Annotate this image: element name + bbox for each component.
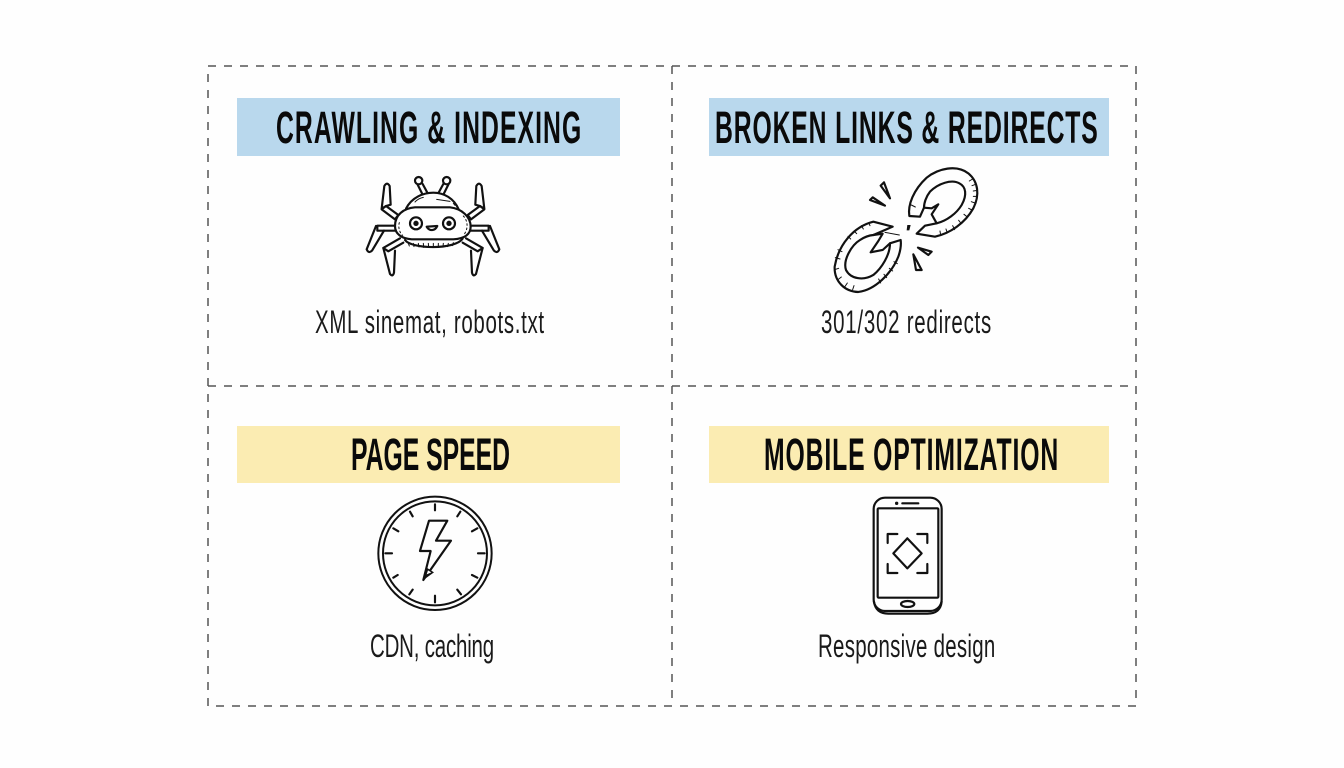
heading: page speed <box>237 426 620 483</box>
heading: mobile optimization: MOBILE OPTIMIZATION <box>764 429 1058 480</box>
caption: crawling and indexing: XML sinemat, robots.txt <box>315 304 545 340</box>
heading: crawling and indexing: CRAWLING & INDEXING <box>276 102 581 153</box>
dashed grid frame <box>208 66 1136 706</box>
icon: broken chain link <box>835 168 977 292</box>
caption: mobile optimization: Responsive design <box>818 628 995 664</box>
icon: stopwatch with lightning bolt <box>378 497 492 610</box>
icon: robot spider <box>367 177 499 275</box>
caption: broken links and redirects: 301/302 redirects <box>821 304 991 340</box>
panel: page speed <box>237 426 620 664</box>
panel: broken links and redirects <box>709 98 1109 340</box>
icon: smartphone <box>874 498 942 614</box>
heading: mobile optimization <box>709 426 1109 483</box>
panel: mobile optimization <box>709 426 1109 664</box>
panel: crawling and indexing <box>237 98 620 340</box>
heading: crawling and indexing <box>237 98 620 156</box>
heading: broken links and redirects: BROKEN LINKS & REDIRECTS <box>715 102 1098 153</box>
heading: page speed: PAGE SPEED <box>351 429 510 480</box>
caption: page speed: CDN, caching <box>370 628 494 664</box>
